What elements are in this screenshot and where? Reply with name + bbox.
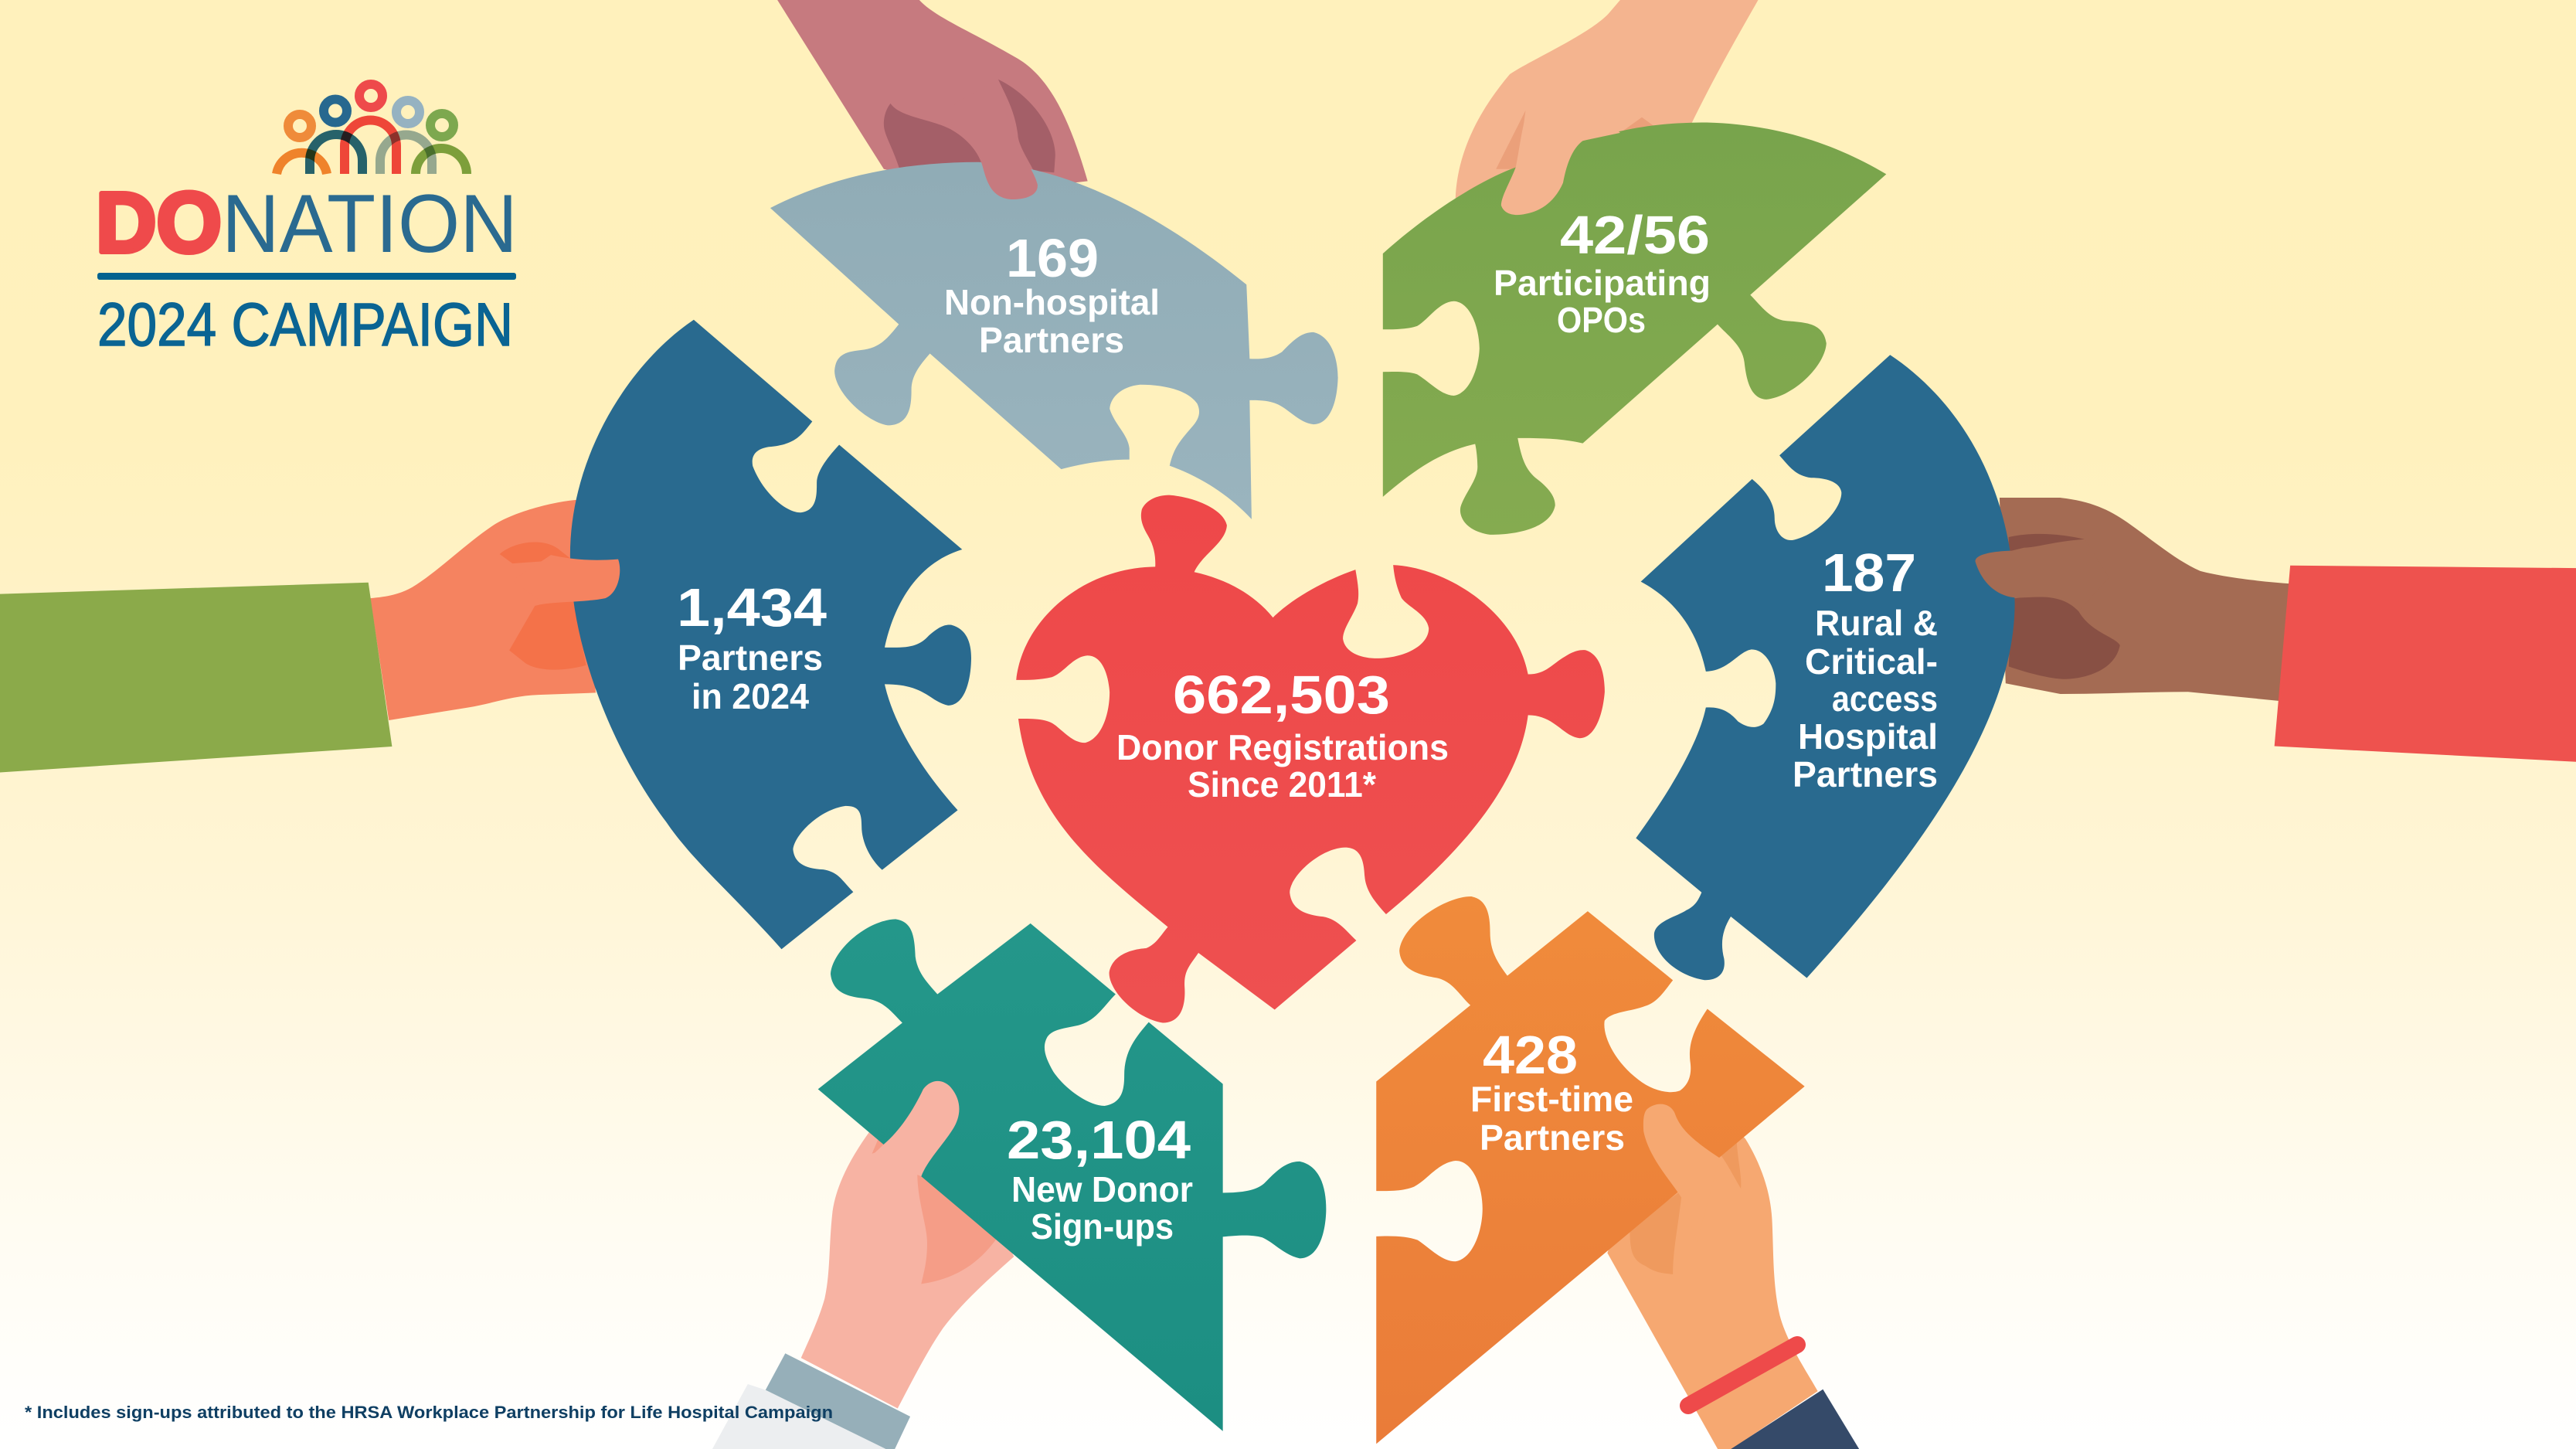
icon: group of people [277,84,467,174]
stat: 1,434 partners in 2024: 1,434 [677,577,827,638]
thumb over orange piece [1643,1104,1719,1242]
stat: 1,434 partners in 2024: Partners [678,638,823,678]
thumb over blue piece [1975,539,2109,611]
footnote: * Includes sign-ups attributed to the HRSA Workplace Partnership for Life Hospital Campaign [25,1403,833,1422]
stat: 42/56 participating OPOs: 42/56 [1560,205,1710,265]
stat: 662,503 donor registrations: 662,503 [1173,665,1390,725]
hand: right with red sleeve [2000,498,2576,762]
stat: 23,104 new donor sign-ups: 23,104 [1007,1110,1191,1170]
stat: 662,503 donor registrations [1116,665,1449,804]
sleeve: red [2275,566,2576,762]
hand: top left holding gray piece [777,0,1088,193]
sleeve: gray cuff [766,1353,910,1449]
finger over green piece [1501,104,1620,215]
bracelet [1688,1345,1797,1406]
stat: 23,104 new donor sign-ups: New Donor [1011,1169,1193,1209]
sleeve: white coat [712,1384,885,1449]
stat: 169 non-hospital partners: 169 [1006,228,1099,288]
stat: 169 non-hospital partners: Partners [979,320,1124,360]
puzzle piece: rural and critical-access hospital partners [1636,355,2109,980]
stat: 662,503 donor registrations: Since 2011* [1188,764,1376,804]
stat: 187 rural and critical-access hospital partners [1793,543,1938,794]
stat: 187 rural and critical-access hospital partners: access [1832,679,1938,719]
stat: 662,503 donor registrations: Donor Registrations [1116,727,1449,767]
stat: 428 first-time partners: Partners [1480,1117,1625,1158]
finger over gray piece [951,80,1038,199]
stat: 428 first-time partners [1470,1025,1633,1158]
logo: DoNation 2024 Campaign [96,84,518,359]
stat: 187 rural and critical-access hospital partners: Partners [1793,754,1938,794]
sleeve: green [0,583,392,773]
logo wordmark: DO: DO [96,175,222,270]
stat: 1,434 partners in 2024 [677,577,827,716]
hand: top right holding green piece [1456,0,1759,207]
hand: left with green sleeve [0,500,596,773]
stat: 23,104 new donor sign-ups [1007,1110,1193,1247]
stat: 42/56 participating OPOs: Participating [1494,263,1711,303]
stat: 428 first-time partners: 428 [1483,1025,1578,1085]
stat: 42/56 participating OPOs [1494,205,1711,340]
sleeve: navy [1731,1389,1859,1449]
logo rule [97,273,516,280]
stat: 187 rural and critical-access hospital partners: Rural & [1815,603,1938,643]
thumb over blue piece [512,555,620,604]
stat: 187 rural and critical-access hospital partners: 187 [1822,543,1916,603]
stat: 169 non-hospital partners: Non-hospital [944,282,1160,322]
logo subtitle: 2024 CAMPAIGN [97,290,513,359]
stat: 187 rural and critical-access hospital partners: Critical- [1805,641,1938,682]
puzzle piece: center heart [1016,495,1605,1022]
stat: 42/56 participating OPOs: OPOs [1557,300,1646,340]
thumb over teal piece [872,1081,959,1176]
puzzle piece: non-hospital partners [770,80,1338,519]
stat: 1,434 partners in 2024: in 2024 [692,676,809,716]
stat: 428 first-time partners: First-time [1470,1079,1633,1119]
hand: bottom right with bracelet [1607,1131,1859,1449]
stat: 187 rural and critical-access hospital partners: Hospital [1798,716,1938,757]
puzzle piece: partners in 2024 [512,320,971,949]
hand: bottom left with white coat sleeve [712,1131,1014,1449]
puzzle piece: new donor sign-ups [818,919,1326,1431]
stat: 169 non-hospital partners [944,228,1160,360]
logo wordmark: NATION: NATION [222,177,518,270]
puzzle piece: first-time partners [1376,896,1805,1444]
stat: 23,104 new donor sign-ups: Sign-ups [1031,1206,1174,1247]
puzzle piece: participating OPOs [1383,104,1886,535]
